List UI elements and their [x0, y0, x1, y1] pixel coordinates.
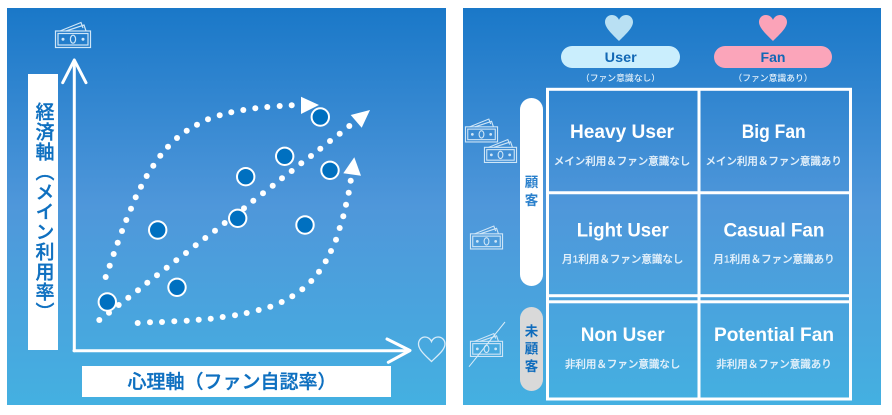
panel: customer segment matrix: [463, 8, 881, 405]
cell: Casual Fan: Casual Fan: [724, 221, 824, 242]
horizontal axis label: 心理軸（ファン自認率）: [127, 371, 337, 393]
column header: Fan: [714, 46, 832, 68]
panel: scatter chart of economic axis and psychological axis: [7, 8, 446, 405]
horizontal axis label: [82, 366, 391, 397]
column note: without fan awareness: （ファン意識なし）: [581, 72, 660, 83]
column header: User: [561, 46, 680, 68]
data points: [99, 108, 339, 311]
cell: Big Fan: Big Fan: [742, 122, 806, 143]
row label: customers: [520, 98, 543, 286]
dotted arrow: upper curve: [103, 97, 319, 280]
arrow: vertical axis: [63, 60, 86, 351]
row label: non-customers: [520, 307, 543, 391]
cell: Light User: 月1利用＆ファン意識なし: [562, 252, 683, 266]
cell: Potential Fan: [714, 325, 834, 370]
row label: non-customers: 未: [525, 324, 539, 339]
icon: pink heart: [759, 15, 787, 41]
cell: Heavy User: [554, 122, 690, 168]
column header: User: User: [605, 49, 637, 65]
icon: money at top of vertical axis: [56, 22, 90, 48]
column note: with fan awareness: （ファン意識あり）: [733, 72, 813, 83]
dotted arrow: diagonal line: [96, 110, 370, 323]
cell: Casual Fan: [713, 221, 835, 266]
row label: customers: 顧: [525, 175, 539, 190]
row label: non-customers: 顧: [525, 342, 539, 356]
column header: Fan: Fan: [760, 49, 786, 65]
cell: Non User: [565, 325, 680, 370]
cell: Non User: Non User: [581, 325, 665, 346]
row label: non-customers: 客: [525, 358, 539, 374]
cell: Heavy User: メイン利用＆ファン意識なし: [554, 154, 690, 168]
cell: Light User: [562, 221, 683, 266]
matrix grid: [547, 89, 851, 400]
icon: money stack: [470, 226, 503, 249]
cell: Potential Fan: 非利用＆ファン意識あり: [716, 358, 832, 370]
icon: crossed out money stack: [469, 322, 505, 367]
icon: two money stacks: [465, 119, 517, 162]
cell: Non User: 非利用＆ファン意識なし: [565, 358, 680, 370]
cell: Big Fan: [705, 122, 842, 168]
cell: Potential Fan: Potential Fan: [714, 325, 834, 346]
cell: Casual Fan: 月1利用＆ファン意識あり: [713, 252, 835, 266]
icon: light blue heart: [605, 15, 633, 41]
panel background: left: [7, 8, 446, 405]
cell: Light User: Light User: [577, 221, 669, 242]
arrow: horizontal axis: [74, 339, 410, 362]
cell: Big Fan: メイン利用＆ファン意識あり: [705, 154, 842, 168]
panel background: right: [463, 8, 881, 405]
cell: Heavy User: Heavy User: [570, 122, 675, 143]
icon: outlined heart at end of horizontal axis: [418, 337, 445, 362]
vertical axis label: [28, 74, 58, 350]
vertical axis label: 経済軸（メイン利用率）: [32, 101, 54, 322]
dotted arrow: lower curve: [135, 157, 361, 326]
row label: customers: 客: [525, 192, 539, 208]
